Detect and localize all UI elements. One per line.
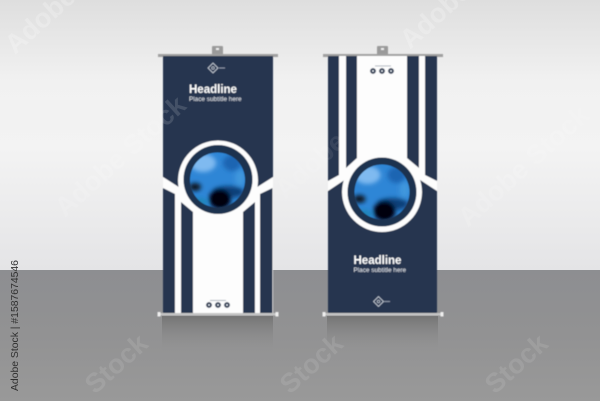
watermarks: Adobe xyxy=(269,126,351,204)
right banner headline: Headline xyxy=(354,255,401,267)
right banner photo circle xyxy=(342,152,422,232)
left banner top rail xyxy=(158,46,278,57)
left banner reflection xyxy=(162,316,273,352)
left banner footer icons xyxy=(206,300,230,308)
stock image credit: Adobe Stock | #1587674546 xyxy=(10,260,21,391)
left banner headline: Headline xyxy=(189,84,237,96)
watermarks: Stock xyxy=(479,327,554,399)
right banner navy lower panel xyxy=(328,155,437,313)
left banner logo xyxy=(208,63,225,73)
right banner white panel xyxy=(328,56,437,313)
watermarks: Adobe Stock xyxy=(49,89,192,222)
watermarks: Stock xyxy=(79,327,154,399)
right banner top rail xyxy=(323,46,443,57)
right banner stripes xyxy=(328,56,437,181)
right banner reflection xyxy=(327,316,438,352)
left banner subtitle: Place subtitle here xyxy=(189,96,242,103)
background wall xyxy=(0,0,600,271)
right banner logo xyxy=(374,297,390,306)
watermarks: Stock xyxy=(274,327,349,399)
left banner stripes xyxy=(163,188,272,313)
left roll-up banner xyxy=(158,46,278,316)
left banner navy panel xyxy=(163,56,273,313)
left banner white lower area xyxy=(163,177,273,313)
right banner subtitle: Place subtitle here xyxy=(354,267,407,274)
left banner photo circle xyxy=(178,140,258,220)
right banner footer icons xyxy=(370,66,394,74)
floor xyxy=(0,270,600,401)
left banner bottom rail xyxy=(158,312,278,316)
watermarks: Adobe Stock xyxy=(452,99,595,232)
right banner bottom rail xyxy=(322,312,444,316)
right roll-up banner xyxy=(322,46,444,316)
